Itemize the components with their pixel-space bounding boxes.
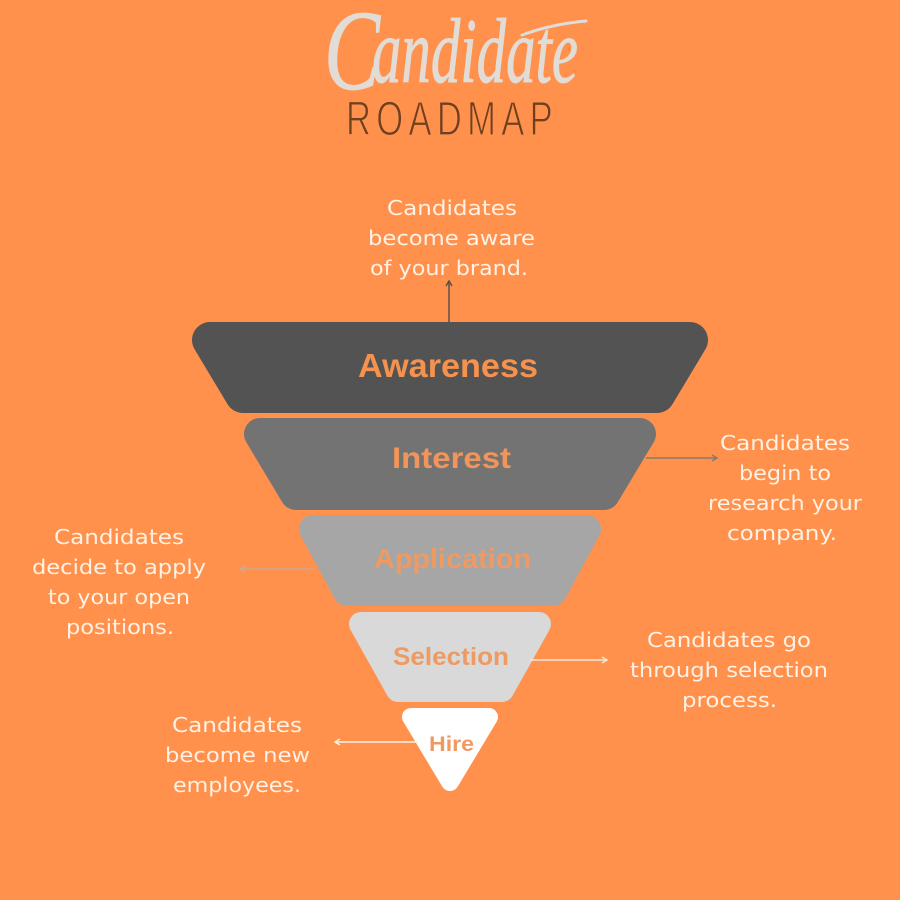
callout: awareness: of your brand. — [370, 256, 528, 280]
funnel tier: selection: Selection — [393, 643, 509, 671]
callout: hire: employees. — [173, 773, 301, 797]
callout: application — [32, 525, 206, 639]
callout: awareness — [368, 196, 535, 280]
funnel tier: interest: Interest — [392, 442, 511, 475]
callout: hire: Candidates — [172, 713, 302, 737]
title script line: andidate — [372, 0, 578, 102]
funnel tier: awareness: Awareness — [358, 347, 538, 384]
funnel tier: application: Application — [374, 543, 531, 574]
callout: interest: begin to — [739, 461, 831, 485]
arrow: interest — [646, 455, 717, 461]
callout: awareness: become aware — [368, 226, 535, 250]
callout: hire: become new — [165, 743, 310, 767]
funnel tier: hire: Hire — [429, 733, 474, 756]
title subtitle line: ROADMAP — [346, 91, 553, 145]
callout: interest: research your — [708, 491, 863, 515]
callout: interest — [708, 431, 863, 545]
funnel tier: interest — [260, 434, 640, 494]
callout: selection: process. — [682, 688, 777, 712]
callout: selection — [630, 628, 828, 712]
arrow: application — [240, 566, 314, 572]
funnel tier: awareness — [210, 340, 690, 395]
arrow: selection — [530, 657, 607, 663]
arrow: hire — [335, 739, 418, 745]
callout: selection: through selection — [630, 658, 828, 682]
callout: application: Candidates — [54, 525, 184, 549]
callout: selection: Candidates go — [647, 628, 811, 652]
funnel tier: application — [313, 529, 587, 592]
callout: interest: company. — [727, 521, 837, 545]
callout: awareness: Candidates — [387, 196, 517, 220]
callout: application: to your open — [48, 585, 190, 609]
arrow: awareness — [446, 281, 452, 323]
callout: application: decide to apply — [32, 555, 206, 579]
title — [324, 0, 586, 145]
callout: application: positions. — [66, 615, 174, 639]
callout: hire — [165, 713, 310, 797]
callout: interest: Candidates — [720, 431, 850, 455]
funnel tier: hire — [411, 717, 489, 782]
funnel tier: selection — [361, 624, 539, 690]
title script line — [324, 0, 586, 114]
